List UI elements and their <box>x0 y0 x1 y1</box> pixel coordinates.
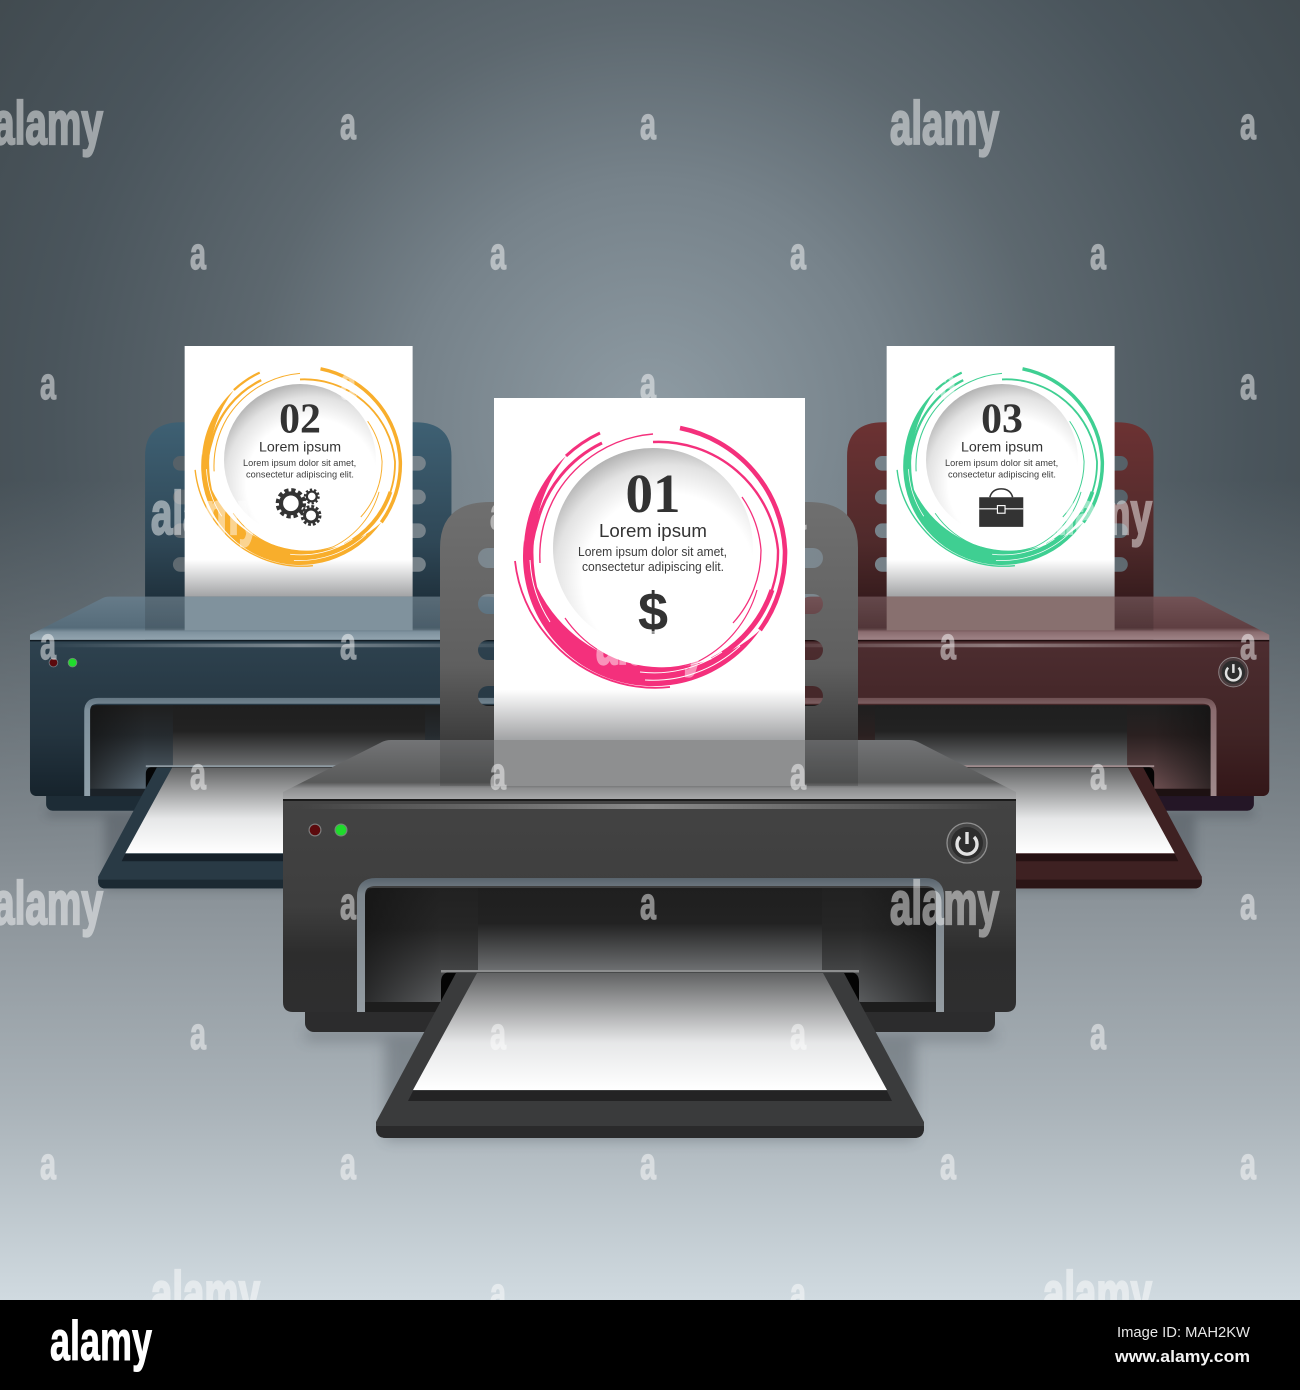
printer 03: maroon, right <box>732 346 1269 890</box>
watermarks: a <box>1240 98 1257 149</box>
watermarks: a <box>1240 358 1257 409</box>
watermarks: a <box>940 618 957 669</box>
heading: Lorem ipsum <box>259 439 341 455</box>
output tray <box>376 973 924 1138</box>
watermarks: a <box>190 748 207 799</box>
watermarks: alamy <box>1043 1260 1152 1327</box>
power button <box>947 823 987 863</box>
paper circle 02 <box>195 369 400 566</box>
body <box>283 800 1016 1012</box>
watermarks: a <box>790 748 807 799</box>
watermarks: a <box>790 1008 807 1059</box>
watermarks: a <box>790 228 807 279</box>
watermarks: a <box>640 1138 657 1189</box>
paper sheet <box>494 398 805 741</box>
watermarks: a <box>340 878 357 929</box>
watermarks: a <box>640 878 657 929</box>
watermarks: a <box>940 358 957 409</box>
output opening <box>361 882 940 1012</box>
watermarks: alamy <box>151 480 260 547</box>
watermarks: a <box>340 98 357 149</box>
holder with slots <box>440 502 858 800</box>
heading: Lorem ipsum <box>599 520 707 541</box>
description: Lorem ipsum dolor sit amet, <box>243 458 356 469</box>
shadow <box>305 1030 995 1140</box>
glass top <box>30 597 567 640</box>
watermarks: a <box>1240 618 1257 669</box>
watermarks: a <box>640 358 657 409</box>
paper sheet <box>185 346 413 597</box>
watermarks: a <box>640 98 657 149</box>
brush ring <box>515 428 785 688</box>
LEDs <box>49 658 77 667</box>
description: Lorem ipsum dolor sit amet, <box>945 458 1058 469</box>
watermarks: a <box>1240 878 1257 929</box>
base foot <box>748 787 1254 811</box>
glass top <box>283 740 1016 799</box>
body <box>30 641 567 796</box>
output opening <box>87 701 512 796</box>
website: www.alamy.com <box>1114 1347 1250 1366</box>
output tray <box>800 767 1202 888</box>
description line 2: consectetur adipiscing elit. <box>582 560 724 574</box>
output opening <box>789 701 1214 796</box>
watermarks: a <box>1090 748 1107 799</box>
description line 2: consectetur adipiscing elit. <box>246 469 354 480</box>
holder with slots <box>847 422 1153 641</box>
printer 02: navy, left <box>30 346 567 890</box>
watermarks: a <box>1240 1138 1257 1189</box>
watermarks: alamy <box>596 610 705 677</box>
watermarks: a <box>190 1008 207 1059</box>
base foot <box>305 1000 995 1032</box>
number: 02 <box>279 397 321 443</box>
LEDs <box>308 824 348 836</box>
number: 01 <box>626 463 680 524</box>
watermarks: a <box>490 228 507 279</box>
icon: briefcase <box>979 489 1023 527</box>
watermarks: a <box>940 1138 957 1189</box>
paper sheet <box>887 346 1115 597</box>
watermarks: a <box>790 488 807 539</box>
brush ring <box>195 369 400 566</box>
holder with slots <box>145 422 451 641</box>
watermarks: alamy <box>890 870 999 937</box>
watermarks: a <box>490 488 507 539</box>
power button <box>1219 658 1248 687</box>
watermarks: a <box>1090 228 1107 279</box>
glass top <box>732 597 1269 640</box>
watermarks: a <box>340 358 357 409</box>
watermarks: a <box>790 1268 807 1319</box>
watermarks: a <box>40 618 57 669</box>
icon: dollar: $ <box>638 582 668 642</box>
description line 2: consectetur adipiscing elit. <box>948 469 1056 480</box>
disc <box>553 448 753 648</box>
watermarks: a <box>40 1138 57 1189</box>
watermarks: a <box>490 1008 507 1059</box>
paper circle 03 <box>897 369 1102 566</box>
watermarks: a <box>190 228 207 279</box>
image id: Image ID: MAH2KW <box>1117 1324 1251 1341</box>
footer logo: alamy <box>50 1309 152 1372</box>
paper circle 01 <box>515 428 785 688</box>
body <box>732 641 1269 796</box>
watermarks: a <box>40 358 57 409</box>
disc <box>926 384 1078 536</box>
watermarks: a <box>490 748 507 799</box>
output tray <box>98 767 500 888</box>
watermarks: a <box>1090 1008 1107 1059</box>
icon: gears <box>278 490 320 525</box>
watermarks: a <box>490 1268 507 1319</box>
footer bar <box>0 1300 1300 1390</box>
base foot <box>46 787 552 811</box>
watermarks: alamy <box>890 90 999 157</box>
watermarks: a <box>340 1138 357 1189</box>
shadow <box>748 809 1254 890</box>
shadow <box>46 809 552 890</box>
watermarks: a <box>340 618 357 669</box>
printer 01: black, center <box>283 398 1016 1140</box>
description: Lorem ipsum dolor sit amet, <box>578 545 727 559</box>
watermarks: alamy <box>1043 480 1152 547</box>
brush ring <box>897 369 1102 566</box>
watermarks: alamy <box>151 1260 260 1327</box>
number: 03 <box>981 397 1023 443</box>
heading: Lorem ipsum <box>961 439 1043 455</box>
disc <box>224 384 376 536</box>
